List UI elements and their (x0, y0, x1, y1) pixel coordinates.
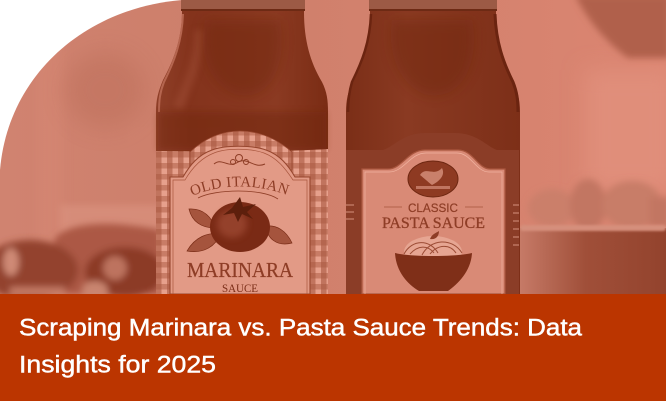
background: blurred top-right object (575, 0, 666, 58)
metal lid (369, 0, 497, 9)
glass body (346, 0, 520, 294)
icon: oval emblem (408, 161, 458, 197)
jar: Classic Pasta Sauce (346, 0, 520, 294)
label text: marinara: MARINARA (187, 258, 294, 282)
label text: classic (384, 203, 483, 212)
glass body (156, 11, 328, 152)
scalloped label (170, 146, 310, 294)
title line 1: Scraping Marinara vs. Pasta Sauce Trends: Data (19, 314, 583, 342)
gingham top arch (190, 131, 292, 170)
label text: old italian: OLD ITALIAN (190, 176, 290, 195)
photo: marinara and pasta sauce jars with red duotone (0, 0, 666, 294)
jar: Old Italian Marinara (154, 0, 330, 294)
label text: pasta sauce: PASTA SAUCE (382, 215, 485, 232)
metal lid (181, 0, 305, 9)
background: blurred pasta in bowl (520, 179, 666, 294)
icon: basil leaves (187, 209, 292, 252)
ornament (214, 154, 265, 165)
ornate label panel (362, 150, 505, 294)
small side text lines (346, 204, 519, 246)
label text: sauce: SAUCE (222, 281, 258, 295)
gingham band (156, 149, 328, 294)
icon: bowl of spaghetti (395, 231, 472, 291)
dark label band (346, 133, 519, 294)
title line 2: Insights for 2025 (19, 352, 216, 378)
label text: classic: CLASSIC (408, 201, 458, 215)
background: blurred kitchen wall (0, 0, 666, 294)
icon: tomato (210, 197, 270, 252)
background: blurred tomatoes (0, 224, 165, 300)
title banner (0, 294, 666, 401)
